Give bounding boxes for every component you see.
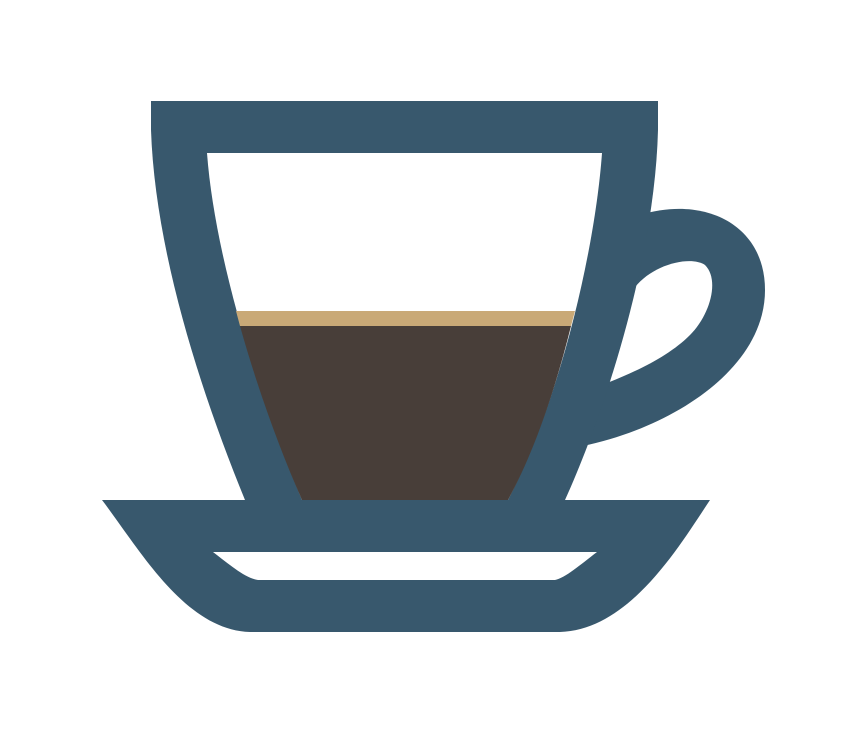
- icon: cup body: [151, 101, 658, 500]
- icon: cup handle: [583, 209, 765, 446]
- icon: saucer: [102, 500, 710, 632]
